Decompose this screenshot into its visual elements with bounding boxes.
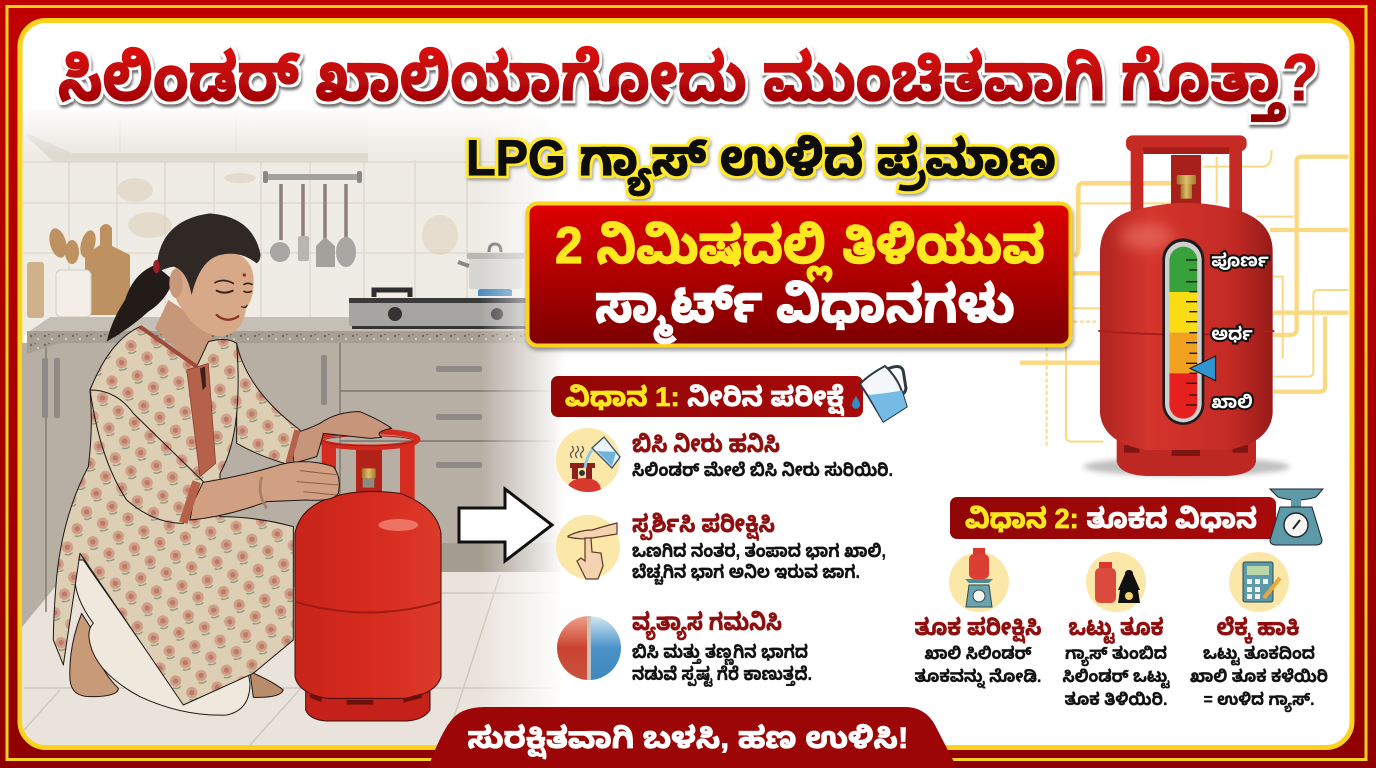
base	[306, 690, 430, 721]
hair	[157, 213, 261, 295]
step text: ಬೆಚ್ಚಗಿನ ಭಾಗ ಅನಿಲ ಇರುವ ಜಾಗ.	[632, 562, 860, 585]
floor	[22, 570, 582, 750]
valve	[362, 468, 376, 488]
neck	[1171, 155, 1201, 205]
step text: ತೂಕ ತಿಳಿಯಿರಿ.	[1064, 690, 1168, 709]
step text	[914, 644, 1042, 689]
upper cabinets	[27, 133, 368, 162]
base	[1117, 440, 1256, 476]
step heading: ಒಟ್ಟು ತೂಕ	[1068, 614, 1164, 644]
stove and pot	[349, 244, 529, 329]
utensil rail	[263, 171, 362, 267]
step text	[1190, 644, 1328, 713]
back foot	[70, 613, 118, 697]
step text	[632, 642, 812, 687]
front foot	[250, 672, 283, 697]
headline line one: 2 ನಿಮಿಷದಲ್ಲಿ ತಿಳಿಯುವ	[555, 217, 1045, 282]
step heading: ಬಿಸಿ ನೀರು ಹನಿಸಿ	[632, 431, 780, 458]
step text: ಒಣಗಿದ ನಂತರ, ತಂಪಾದ ಭಾಗ ಖಾಲಿ,	[632, 541, 886, 561]
step text: ಖಾಲಿ ಸಿಲಿಂಡರ್	[924, 644, 1032, 663]
bangle	[260, 477, 267, 508]
collar	[1126, 135, 1247, 212]
step text	[1062, 644, 1170, 709]
right cylinder with gauge	[1083, 135, 1290, 476]
step heading: ಲೆಕ್ಕ ಹಾಕಿ	[1216, 614, 1300, 644]
far sleeve	[237, 343, 300, 465]
base cabinets	[22, 343, 583, 627]
bottom banner	[428, 707, 957, 768]
step text: ಒಟ್ಟು ತೂಕದಿಂದ	[1203, 644, 1315, 666]
neckline trim	[140, 327, 216, 477]
step text: ಬಿಸಿ ಮತ್ತು ತಣ್ಣಗಿನ ಭಾಗದ	[632, 642, 808, 665]
icon: cylinder on scale	[949, 548, 1009, 612]
banner text: ಸುರಕ್ಷಿತವಾಗಿ ಬಳಸಿ, ಹಣ ಉಳಿಸಿ!	[468, 722, 908, 760]
step text: = ಉಳಿದ ಗ್ಯಾಸ್.	[1204, 690, 1314, 713]
wooden board and spoons	[27, 224, 130, 318]
seam	[1098, 331, 1274, 335]
level arrow	[1190, 356, 1216, 381]
near sleeve	[90, 390, 203, 523]
ground shadow	[1083, 457, 1290, 476]
step heading: ಸ್ಪರ್ಶಿಸಿ ಪರೀಕ್ಷಿಸಿ	[632, 511, 775, 541]
kitchen background	[22, 105, 583, 750]
subtitle: LPG ಗ್ಯಾಸ್ ಉಳಿದ ಪ್ರಮಾಣ	[466, 130, 1056, 196]
icon: hand touching	[556, 515, 620, 579]
step: check empty weight	[914, 548, 1042, 689]
step heading: ವ್ಯತ್ಯಾಸ ಗಮನಿಸಿ	[632, 609, 782, 641]
wall tiles	[23, 120, 545, 335]
step text: ಗ್ಯಾಸ್ ತುಂಬಿದ	[1065, 644, 1167, 667]
foot holes	[310, 693, 422, 705]
hair tie	[153, 260, 160, 273]
step: notice difference	[557, 609, 812, 687]
icon: weighing scale	[1270, 489, 1323, 545]
icon: hot and cold halves	[557, 616, 621, 680]
highlight	[378, 519, 418, 531]
step text: ನಡುವೆ ಸ್ಪಷ್ಟ ಗೆರೆ ಕಾಣುತ್ತದೆ.	[632, 664, 812, 687]
step text: ಸಿಲಿಂಡರ್ ಮೇಲೆ ಬಿಸಿ ನೀರು ಸುರಿಯಿರಿ.	[632, 460, 893, 480]
gauge label empty: ಖಾಲಿ	[1211, 392, 1253, 412]
fingers	[297, 471, 339, 495]
facial features	[215, 280, 252, 320]
step: pour hot water	[556, 428, 893, 497]
near arm and hand	[190, 462, 339, 520]
icon: pouring jug	[556, 428, 620, 497]
step heading: ತೂಕ ಪರೀಕ್ಷಿಸಿ	[914, 614, 1042, 644]
kurta body	[53, 327, 293, 705]
step text: ತೂಕವನ್ನು ನೋಡಿ.	[914, 667, 1042, 689]
woman kneeling and holding cylinder	[53, 213, 441, 721]
face	[172, 249, 254, 337]
headline line two: ಸ್ಮಾರ್ಟ್ ವಿಧಾನಗಳು	[595, 276, 1015, 344]
top fade	[23, 110, 534, 144]
granite counter	[27, 317, 583, 354]
collar legs	[322, 445, 415, 503]
decorative circuit lines	[1020, 150, 1348, 447]
gauge label full: ಪೂರ್ಣ	[1211, 251, 1269, 271]
step text: ಖಾಲಿ ತೂಕ ಕಳೆಯಿರಿ	[1190, 667, 1328, 686]
method 1 banner	[551, 376, 863, 417]
left cylinder	[295, 431, 441, 721]
icon: water jug	[852, 366, 907, 422]
cuff	[183, 482, 197, 523]
ear	[169, 269, 183, 298]
neck	[155, 300, 212, 368]
valve	[1177, 175, 1196, 199]
bindi	[243, 273, 246, 277]
arrow	[459, 489, 552, 561]
step: calculate	[1190, 552, 1328, 713]
salwar trousers	[75, 560, 250, 715]
step: touch test	[556, 511, 886, 585]
highlight	[1120, 223, 1173, 250]
method 2 heading: ವಿಧಾನ 2: ತೂಕದ ವಿಧಾನ	[965, 503, 1257, 534]
icon: calculator and pencil	[1229, 552, 1289, 612]
step text: ಸಿಲಿಂಡರ್ ಒಟ್ಟು	[1062, 667, 1170, 689]
method 2 banner	[950, 497, 1276, 539]
gauge	[1162, 238, 1204, 425]
far hand and arm	[293, 412, 392, 463]
gauge label half: ಅರ್ಧ	[1211, 324, 1253, 344]
ponytail	[107, 265, 173, 342]
body	[1100, 203, 1273, 450]
icon: cylinder and weight	[1086, 552, 1146, 612]
far cuff	[288, 430, 297, 463]
base holes	[1124, 445, 1248, 456]
body	[295, 491, 441, 698]
neck	[356, 448, 382, 492]
headline box	[528, 204, 1070, 346]
method 1 heading: ವಿಧಾನ 1: ನೀರಿನ ಪರೀಕ್ಷೆ	[565, 382, 845, 416]
seam	[295, 602, 441, 612]
collar ring	[319, 431, 418, 447]
step: total weight	[1062, 552, 1170, 709]
step text	[632, 541, 886, 585]
